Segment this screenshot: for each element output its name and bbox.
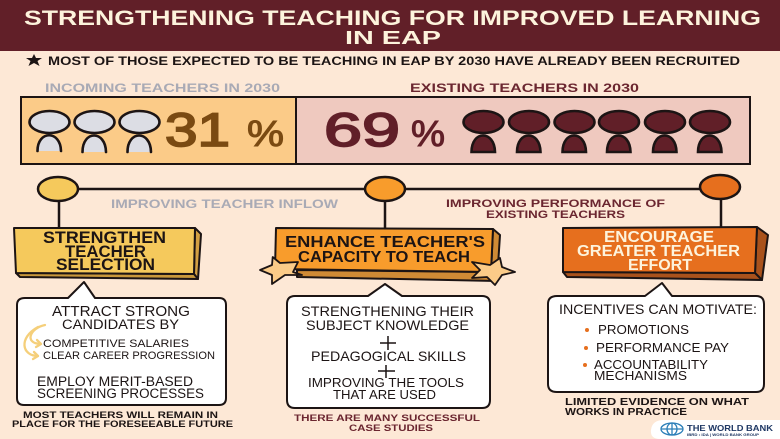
stat: 31 percent: 31	[165, 103, 230, 156]
icon: yellow arrows	[24, 325, 45, 359]
list: incentive bullets	[583, 323, 730, 383]
list: incentive bullets: MECHANISMS	[594, 369, 687, 383]
stat: 31 percent	[165, 103, 284, 156]
text: attract strong candidates: CANDIDATES BY	[62, 317, 179, 332]
icon: right star	[472, 258, 515, 285]
key message with star: MOST OF THOSE EXPECTED TO BE TEACHING IN EAP BY 2030 HAVE ALREADY BEEN RECRUITED	[48, 54, 740, 68]
label: improving performance of existing teachers	[446, 198, 665, 221]
list: attraction factors	[43, 338, 215, 362]
heading: encourage greater teacher effort: EFFORT	[628, 257, 692, 274]
text: merit-based screening	[37, 374, 204, 401]
note: limited evidence	[565, 397, 749, 418]
text: incentives heading: INCENTIVES CAN MOTIVATE:	[559, 301, 757, 317]
panel: strengthen teacher selection	[14, 228, 201, 279]
list: incentive bullets: PERFORMANCE PAY	[596, 341, 730, 355]
text: attract strong candidates	[52, 304, 190, 332]
text: attract strong candidates: ATTRACT STRONG	[52, 304, 190, 320]
icon: plus signs	[378, 336, 396, 378]
timeline connecting three pillars	[38, 175, 740, 228]
text: merit-based screening: EMPLOY MERIT-BASED	[37, 374, 193, 389]
callout: effort incentives	[548, 283, 764, 392]
heading: encourage greater teacher effort	[577, 229, 740, 274]
text: improving tools	[308, 375, 464, 402]
label: existing teachers: EXISTING TEACHERS IN 2030	[410, 81, 639, 95]
text: pedagogical skills: PEDAGOGICAL SKILLS	[311, 348, 466, 364]
list: incentive bullets: PROMOTIONS	[598, 323, 689, 337]
heading: enhance teacher's capacity: CAPACITY TO TEACH	[298, 249, 470, 266]
stat: 31 percent: %	[247, 113, 284, 154]
text: improving tools: IMPROVING THE TOOLS	[308, 375, 464, 390]
note: teachers remain in place: MOST TEACHERS WILL REMAIN IN	[23, 410, 218, 421]
callout: selection actions	[17, 282, 226, 405]
panel: encourage greater teacher effort	[563, 227, 768, 280]
panel: incoming teachers 31 percent	[21, 97, 296, 164]
text: subject knowledge: STRENGTHENING THEIR	[301, 303, 474, 319]
heading: strengthen teacher selection: SELECTION	[56, 256, 155, 274]
panel: existing teachers 69 percent	[296, 97, 750, 164]
heading: strengthen teacher selection: TEACHER	[65, 243, 146, 261]
panel: enhance teacher's capacity	[260, 228, 515, 285]
text: improving tools: THAT ARE USED	[333, 387, 436, 402]
icon: left star	[260, 257, 302, 284]
text: merit-based screening: SCREENING PROCESSES	[37, 386, 204, 401]
text: subject knowledge: SUBJECT KNOWLEDGE	[306, 317, 469, 333]
logo: the world bank: IBRD • IDA | WORLD BANK GROUP	[687, 433, 760, 437]
heading: enhance teacher's capacity	[285, 234, 485, 266]
title banner	[0, 0, 780, 51]
label: improving performance of existing teachers: EXISTING TEACHERS	[486, 209, 625, 221]
note: successful case studies: THERE ARE MANY SUCCESSFUL	[294, 413, 480, 424]
logo: the world bank	[651, 420, 780, 439]
icon: globe	[661, 423, 683, 435]
list: attraction factors: COMPETITIVE SALARIES	[43, 338, 189, 350]
callout: capacity actions	[287, 284, 490, 408]
heading: enhance teacher's capacity: ENHANCE TEACHER'S	[285, 234, 485, 251]
title banner: STRENGTHENING TEACHING FOR IMPROVED LEARNING	[24, 6, 761, 30]
text: subject knowledge	[301, 303, 474, 333]
note: successful case studies: CASE STUDIES	[349, 423, 433, 434]
heading: strengthen teacher selection	[43, 229, 166, 274]
note: limited evidence: WORKS IN PRACTICE	[565, 407, 687, 418]
heading: encourage greater teacher effort: ENCOURAGE	[604, 229, 714, 246]
note: successful case studies	[294, 413, 480, 434]
icon: existing teacher figures	[464, 111, 730, 152]
logo: the world bank: THE WORLD BANK	[687, 423, 774, 433]
list: incentive bullets: ACCOUNTABILITY	[594, 358, 709, 372]
stat: 69 percent	[324, 103, 445, 156]
list: attraction factors: CLEAR CAREER PROGRESSION	[43, 350, 215, 362]
label: incoming teachers: INCOMING TEACHERS IN 2030	[45, 81, 280, 95]
heading: encourage greater teacher effort: GREATER TEACHER	[577, 243, 740, 260]
heading: strengthen teacher selection: STRENGTHEN	[43, 229, 166, 247]
stat: 69 percent: 69	[324, 103, 400, 156]
label: improving performance of existing teachers: IMPROVING PERFORMANCE OF	[446, 198, 665, 210]
note: teachers remain in place	[12, 410, 233, 430]
title banner: IN EAP	[345, 28, 441, 48]
stat: 69 percent: %	[411, 113, 445, 154]
note: teachers remain in place: PLACE FOR THE FORESEEABLE FUTURE	[12, 419, 233, 430]
note: limited evidence: LIMITED EVIDENCE ON WHAT	[565, 397, 749, 408]
label: improving teacher inflow: IMPROVING TEACHER INFLOW	[111, 199, 338, 211]
icon: incoming teacher figures	[30, 111, 160, 152]
